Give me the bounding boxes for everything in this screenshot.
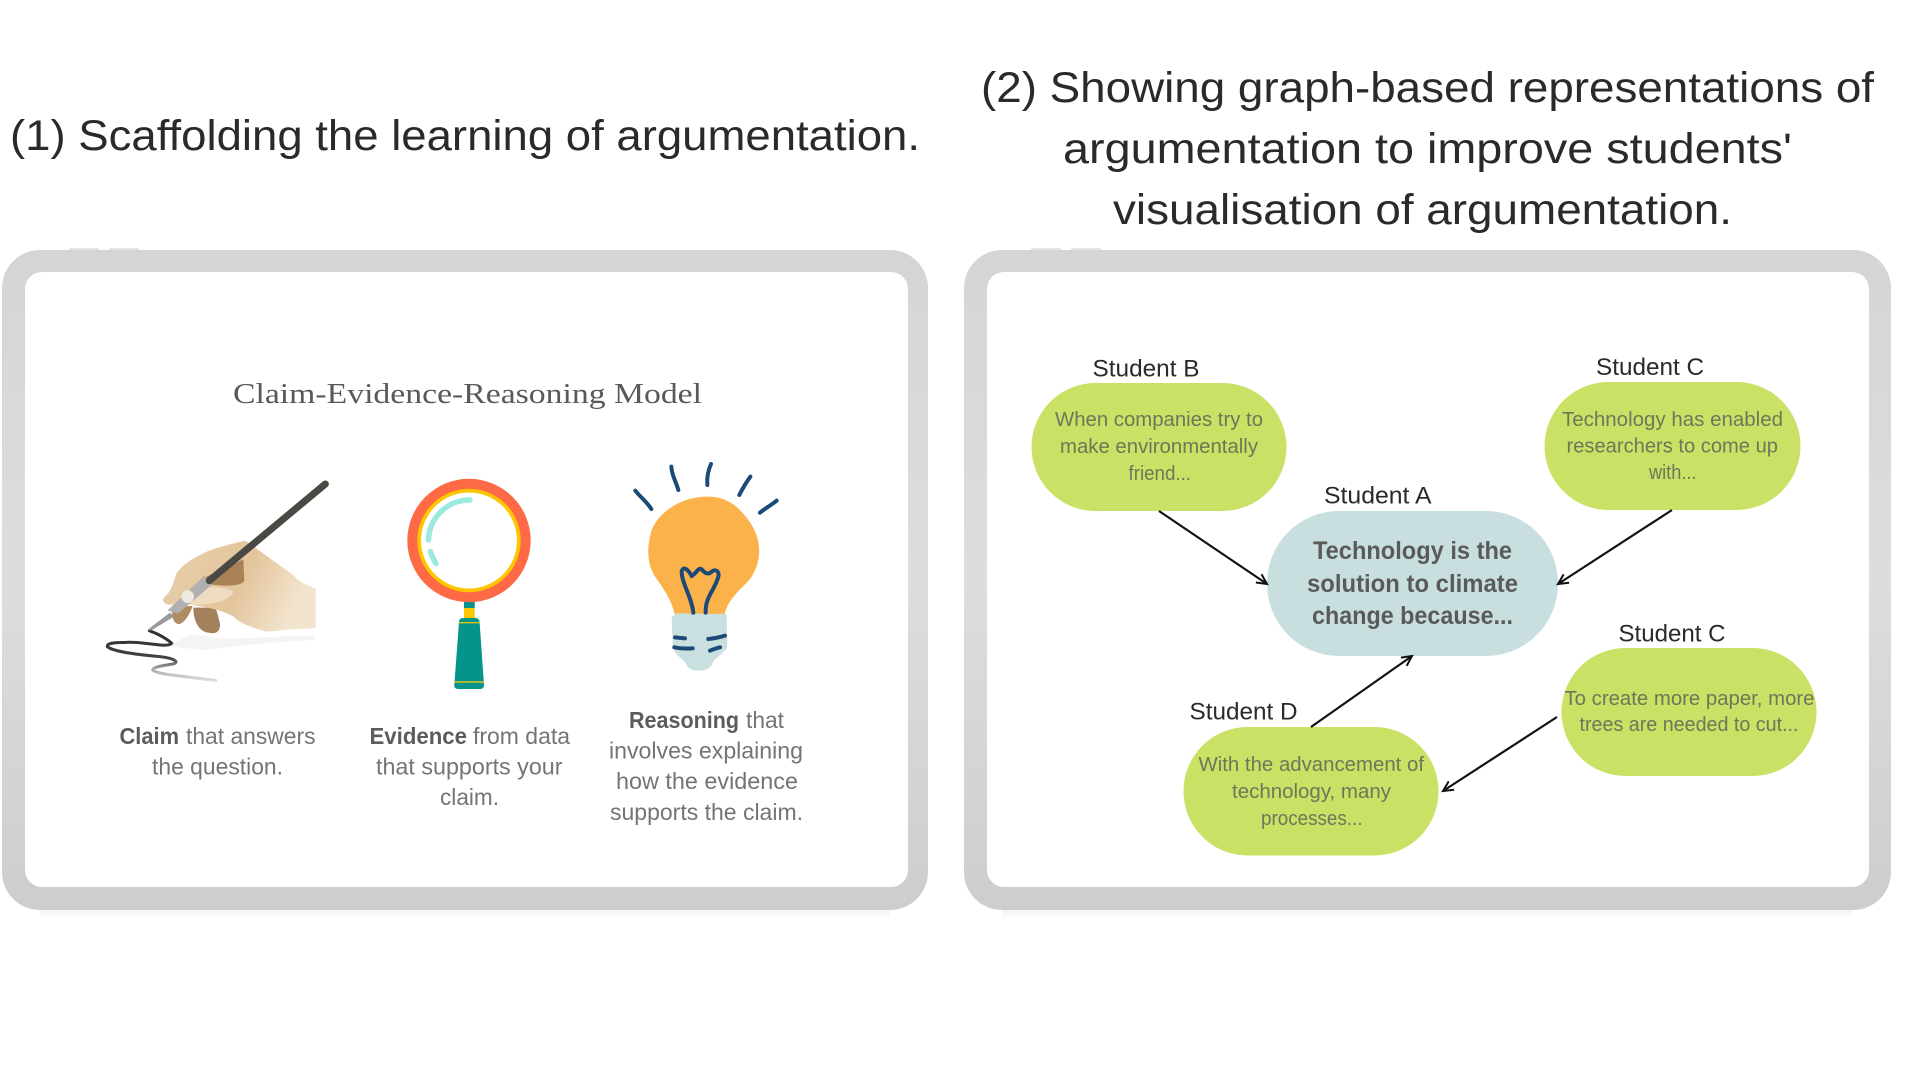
text: reasoning: Reasoning xyxy=(629,707,739,733)
model title: Claim-Evidence-Reasoning Model xyxy=(233,378,702,410)
node: student A xyxy=(1267,482,1558,656)
arrow: student C to student A xyxy=(1558,510,1672,584)
node: student D xyxy=(1184,698,1438,856)
text: reasoning xyxy=(609,707,803,825)
node: student D: Student D xyxy=(1190,698,1298,726)
node: student C top: Student C xyxy=(1596,354,1704,381)
text: reasoning: supports the claim. xyxy=(610,799,803,825)
node: student A: change because... xyxy=(1312,602,1513,630)
text: reasoning: involves explaining xyxy=(609,738,803,764)
heading: graph-based representations: argumentation to improve students' xyxy=(1063,125,1792,173)
node: student D: processes... xyxy=(1261,808,1362,830)
node: student C bottom: trees are needed to cut... xyxy=(1580,714,1798,736)
node: student C bottom xyxy=(1562,620,1816,776)
icon: hand writing with pen xyxy=(107,484,325,681)
text: reasoning: that xyxy=(746,707,785,733)
node: student A: Technology is the xyxy=(1313,537,1512,565)
text: evidence: claim. xyxy=(440,784,499,810)
text: claim: Claim xyxy=(120,723,179,749)
arrow: student D to student A xyxy=(1311,656,1412,727)
heading: graph-based representations: visualisation of argumentation. xyxy=(1113,186,1732,234)
node: student D: With the advancement of xyxy=(1198,754,1424,776)
text: claim xyxy=(120,723,316,780)
arrow: student C to student D xyxy=(1443,717,1557,791)
node: student C top xyxy=(1544,354,1800,510)
node: student B xyxy=(1032,356,1286,511)
icon: magnifying glass xyxy=(407,479,531,689)
panel: claim-evidence-reasoning tablet xyxy=(2,248,928,918)
node: student B: make environmentally xyxy=(1060,436,1258,458)
node: student C top: Technology has enabled xyxy=(1562,409,1783,431)
icon: light bulb xyxy=(635,464,777,671)
text: evidence xyxy=(370,723,570,810)
node: student B: Student B xyxy=(1092,356,1200,382)
node: student D: technology, many xyxy=(1232,781,1391,803)
node: student C top: researchers to come up xyxy=(1566,436,1778,458)
panel: argument graph tablet xyxy=(964,248,1891,918)
text: evidence: that supports your xyxy=(376,754,563,780)
node: student B: When companies try to xyxy=(1055,409,1263,431)
heading: scaffolding: (1) Scaffolding the learning of argumentation. xyxy=(10,112,920,160)
node: student A: Student A xyxy=(1324,482,1432,510)
heading: graph-based representations xyxy=(981,64,1875,234)
text: evidence: from data xyxy=(473,723,570,749)
node: student B: friend... xyxy=(1128,463,1191,485)
text: claim: the question. xyxy=(152,754,283,780)
text: claim: that answers xyxy=(186,723,316,749)
node: student C bottom: Student C xyxy=(1618,620,1726,648)
node: student A: solution to climate xyxy=(1307,570,1518,598)
text: evidence: Evidence xyxy=(370,723,467,749)
heading: graph-based representations: (2) Showing graph-based representations of xyxy=(981,64,1875,112)
node: student C bottom: To create more paper, more xyxy=(1564,688,1814,710)
node: student C top: with... xyxy=(1648,462,1696,484)
text: reasoning: how the evidence xyxy=(616,768,798,794)
arrow: student B to student A xyxy=(1159,511,1267,584)
